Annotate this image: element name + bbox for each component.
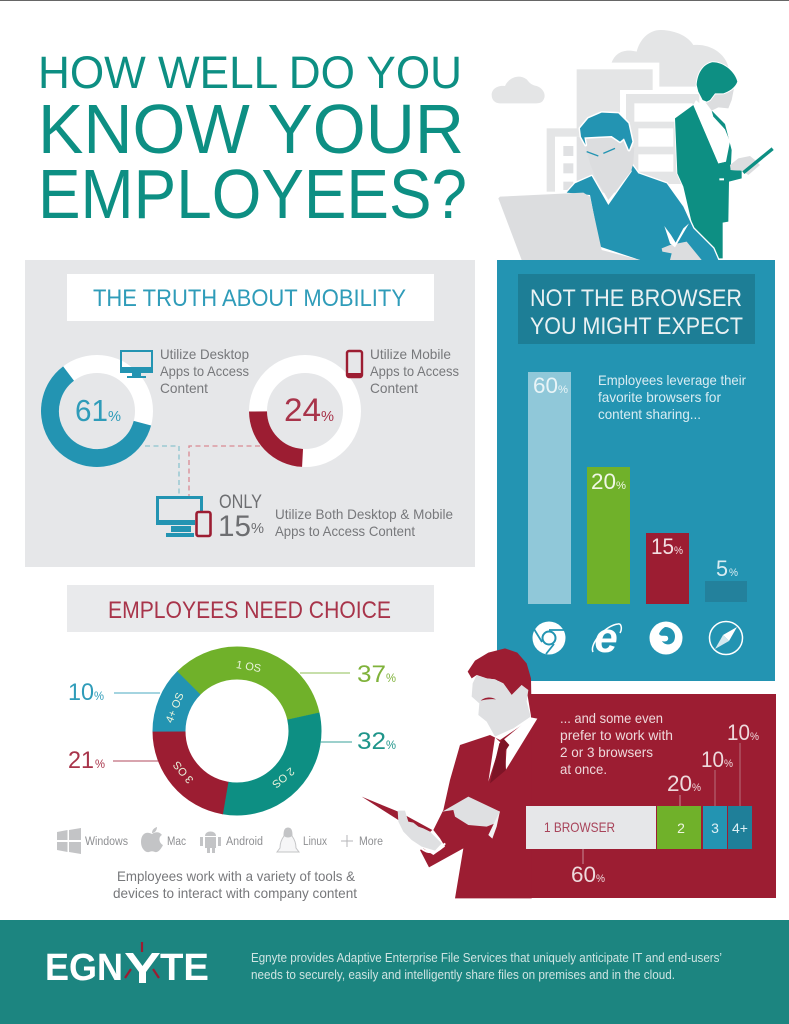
illustration: cityscape with two office workers (492, 30, 773, 260)
connector: dashed lines (145, 446, 260, 496)
caption: tools and devices: devices to interact with company content (113, 885, 357, 901)
label: 60% (571, 849, 605, 887)
label: 10% three browsers: 10 (701, 747, 724, 772)
logo: egnyte: TE (160, 947, 209, 989)
chart: stacked browser bar: 4+ (732, 820, 748, 836)
donut: 24% mobile (256, 362, 354, 460)
footer (0, 920, 789, 1024)
bar: internet explorer 20%: 20 (591, 469, 616, 494)
chart: OS donut: 4+ OS (164, 691, 187, 725)
text: desktop apps: Apps to Access (160, 363, 249, 379)
icon: chrome (532, 622, 566, 654)
text: mobile apps: Content (370, 380, 418, 396)
icon: desktop and mobile (156, 496, 210, 537)
label: 60%: 60 (571, 862, 596, 887)
bar: safari 5%: 5 (716, 556, 728, 581)
icon: windows (57, 828, 81, 854)
title (38, 47, 467, 233)
icon: man with laptop (498, 113, 718, 260)
text: and some even: ... and some even (560, 710, 663, 726)
text: employees leverage: Employees leverage their (598, 372, 746, 388)
label: 37%: % (386, 671, 396, 685)
bar: firefox 15%: 15 (651, 534, 674, 559)
text: utilize both: Utilize Both Desktop & Mobile (275, 506, 453, 522)
panel: the truth about mobility (25, 260, 475, 567)
text: egnyte description (251, 951, 722, 982)
bar: firefox 15% (646, 533, 689, 604)
text: desktop apps: Utilize Desktop (160, 346, 249, 362)
chart: OS donut (141, 635, 333, 827)
text: desktop apps: Content (160, 380, 208, 396)
label: 32%: 32 (357, 728, 386, 755)
text: and some even (560, 710, 673, 777)
icon: mobile phone (347, 351, 362, 377)
donut: 61% desktop (39, 353, 155, 469)
chart: OS donut: 2 OS (269, 765, 296, 790)
legend: operating systems (57, 827, 383, 854)
text: employees leverage (598, 372, 746, 422)
text: and some even: at once. (560, 761, 607, 777)
bar: safari 5% (705, 556, 747, 602)
panel: multiple browsers (362, 648, 776, 898)
bar: internet explorer 20% (587, 467, 630, 604)
panel: browsers (497, 260, 775, 681)
bar: chrome 60% (528, 372, 571, 604)
illustration: man in suit with tablet (362, 648, 537, 898)
text: only 15%: % (251, 520, 264, 537)
label: 10% three browsers (701, 747, 733, 806)
label: 60%: % (596, 873, 605, 885)
text: desktop apps (160, 346, 249, 396)
heading: not the browser: NOT THE BROWSER (530, 285, 742, 312)
bar: firefox 15%: % (674, 545, 683, 557)
label: 21% (68, 747, 158, 774)
heading: employees need choice: EMPLOYEES NEED CHOICE (108, 597, 391, 624)
chart: stacked browser bar: 1 BROWSER (544, 819, 615, 835)
logo: egnyte: EGN (45, 947, 123, 989)
donut: 61% desktop: % (108, 408, 121, 425)
text: only 15%: ONLY (219, 492, 262, 513)
label: 37% (300, 661, 396, 688)
text: employees leverage: favorite browsers for (598, 389, 721, 405)
legend: operating systems: Android (226, 836, 263, 848)
text: egnyte description: Egnyte provides Adaptive Enterprise File Services that uniquely anticipate IT and end-users’ (251, 951, 722, 965)
text: and some even: prefer to work with (560, 727, 673, 743)
heading: not the browser (518, 274, 755, 344)
label: 10% four plus browsers (727, 720, 759, 806)
title: KNOW YOUR (38, 90, 464, 168)
text: utilize both: Apps to Access Content (275, 523, 415, 539)
label: 10% four plus browsers: % (750, 731, 759, 743)
bar: internet explorer 20%: % (616, 480, 626, 492)
chart: stacked browser bar: 3 (711, 820, 719, 836)
label: 32%: % (386, 738, 396, 752)
label: 10% three browsers: % (724, 758, 733, 770)
chart: OS donut: 3 OS (171, 758, 196, 785)
heading: the truth about mobility (67, 274, 434, 321)
label: 32% (320, 728, 396, 755)
legend: operating systems: Mac (167, 836, 186, 848)
donut: 61% desktop: 61 (75, 393, 108, 428)
text: mobile apps: Utilize Mobile (370, 346, 451, 362)
label: 37%: 37 (357, 661, 386, 688)
caption: tools and devices (113, 868, 357, 901)
icon: linux penguin (277, 828, 299, 852)
donut: 24% mobile: % (321, 408, 334, 425)
text: employees leverage: content sharing... (598, 406, 701, 422)
icon: android (200, 832, 221, 853)
text: only 15% (218, 492, 264, 543)
label: 10%: 10 (68, 679, 94, 706)
text: mobile apps: Apps to Access (370, 363, 459, 379)
bar: chrome 60%: 60 (533, 373, 558, 398)
bar: safari 5%: % (729, 567, 738, 579)
icon: desktop monitor (120, 350, 153, 378)
label: 10%: % (94, 689, 104, 703)
title: EMPLOYEES? (38, 155, 467, 233)
icon: safari (710, 622, 742, 654)
text: utilize both (275, 506, 453, 539)
heading: the truth about mobility: THE TRUTH ABOUT MOBILITY (93, 285, 406, 312)
chart: OS donut: 1 OS (235, 659, 262, 675)
legend: operating systems: Linux (303, 836, 327, 848)
legend: operating systems: Windows (85, 836, 128, 848)
label: 21%: 21 (68, 747, 94, 774)
icon: apple (141, 827, 163, 852)
label: 21%: % (95, 757, 105, 771)
label: 10% (68, 679, 160, 706)
icon: woman with tablet (675, 62, 773, 258)
text: only 15%: 15 (218, 510, 251, 543)
donut: 24% mobile: 24 (284, 392, 321, 428)
text: and some even: 2 or 3 browsers (560, 744, 653, 760)
heading: employees need choice (67, 585, 434, 632)
text: mobile apps (370, 346, 459, 396)
label: 20%: % (692, 782, 701, 794)
caption: tools and devices: Employees work with a variety of tools & (117, 868, 356, 884)
icon: plus (341, 835, 353, 847)
label: 20%: 20 (667, 771, 692, 796)
logo: egnyte (45, 942, 209, 989)
icon: internet explorer: e (594, 614, 618, 661)
heading: not the browser: YOU MIGHT EXPECT (530, 313, 743, 340)
label: 20% (667, 771, 701, 806)
chart: stacked browser bar (526, 806, 752, 849)
chart: stacked browser bar: 2 (677, 820, 685, 836)
text: egnyte description: needs to securely, easily and intelligently share files on premises and in the cloud. (251, 968, 675, 982)
icon: clouds and buildings (492, 30, 728, 195)
label: 10% four plus browsers: 10 (727, 720, 750, 745)
title: HOW WELL DO YOU (38, 47, 462, 98)
icon: firefox (650, 622, 682, 654)
bar: chrome 60%: % (558, 384, 568, 396)
legend: operating systems: More (359, 836, 383, 848)
